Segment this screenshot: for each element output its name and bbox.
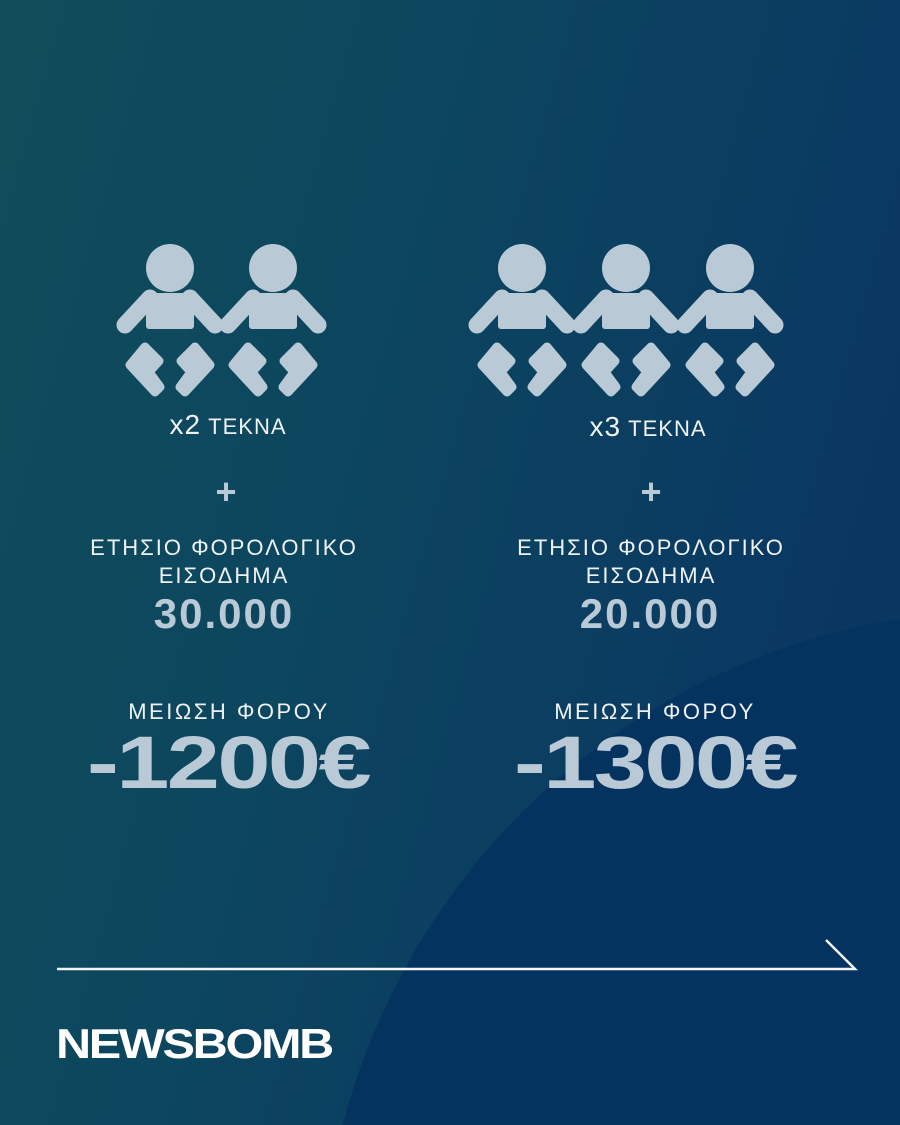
label: x3 ΤΕΚΝΑ: x3 ΤΕΚΝΑ (589, 411, 707, 442)
background circle (342, 694, 682, 1125)
icon: two children (125, 244, 318, 392)
income label left: ΕΙΣΟΔΗΜΑ (159, 563, 289, 588)
plus right: + (640, 471, 662, 512)
icon: three children (477, 244, 775, 392)
reduction value right: -1300€ (514, 721, 797, 804)
income value left: 30.000 (154, 590, 294, 637)
plus left: + (215, 471, 237, 512)
income label right: ΕΙΣΟΔΗΜΑ (586, 563, 716, 588)
income label left: ΕΤΗΣΙΟ ΦΟΡΟΛΟΓΙΚΟ (90, 535, 358, 560)
income value right: 20.000 (580, 590, 720, 637)
income label right: ΕΤΗΣΙΟ ΦΟΡΟΛΟΓΙΚΟ (517, 535, 785, 560)
logo: NEWSBOMB: NEWSBOMB (56, 1020, 333, 1067)
reduction label left: ΜΕΙΩΣΗ ΦΟΡΟΥ (128, 699, 330, 724)
label: x2 ΤΕΚΝΑ: x2 ΤΕΚΝΑ (169, 409, 287, 440)
reduction value left: -1200€ (87, 721, 370, 804)
reduction label right: ΜΕΙΩΣΗ ΦΟΡΟΥ (554, 699, 756, 724)
arrow (57, 940, 855, 969)
